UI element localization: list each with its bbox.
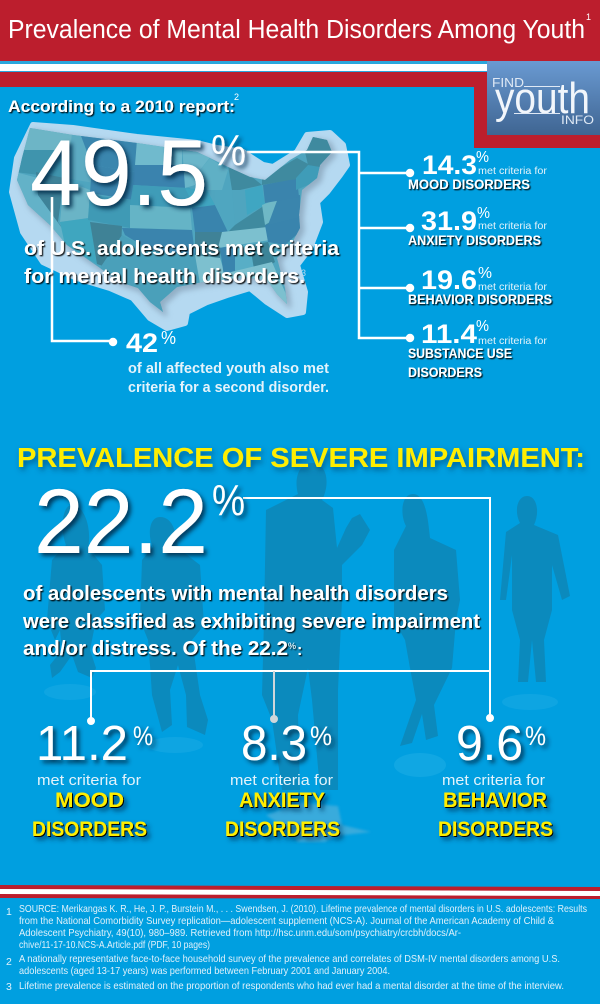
footnotes: Adolescent Psychiatry, 49(10), 980–989. Retrieved from http://hsc.unm.edu/som/psychiatry/crcbh/docs/Ar- [19, 927, 461, 939]
stat: anxiety 8.3% [225, 717, 340, 841]
text: severe impairment description [22, 583, 480, 660]
text: severe impairment description: : [297, 642, 302, 659]
stat: mood 11.2%: % [133, 721, 153, 751]
stat: mood 14.3%: MOOD DISORDERS [408, 177, 530, 192]
US map [12, 120, 347, 328]
stat: mood 11.2%: 11.2 [36, 717, 128, 771]
floor reflections [44, 684, 558, 842]
stat: mood 14.3% [408, 149, 548, 192]
footnotes: 3 [6, 981, 12, 993]
stat: mood 11.2% [32, 717, 153, 841]
footnotes: adolescents (aged 13-17 years) was performed between February 2001 and January 2004. [19, 965, 390, 977]
stat: mood 11.2%: DISORDERS [32, 818, 147, 841]
stat: mood 14.3%: met criteria for [478, 165, 548, 177]
stat: substance use 11.4%: 11.4 [421, 319, 477, 349]
stat: behavior 19.6%: met criteria for [478, 281, 548, 293]
connector lines: 22.2% [88, 498, 493, 724]
text: U.S. adolescents [24, 238, 340, 288]
stat: anxiety 31.9%: 31.9 [421, 206, 477, 236]
stat: anxiety 8.3%: DISORDERS [225, 818, 340, 841]
stat: anxiety 31.9%: % [477, 205, 490, 222]
logo: Find Youth Info [487, 61, 600, 135]
footnote marker 3: 3 [301, 268, 306, 278]
stat: 42% second disorder: 42 [126, 328, 158, 358]
figure 3 [262, 463, 370, 790]
stat: substance use 11.4%: DISORDERS [408, 365, 482, 380]
report intro heading: According to a 2010 report: [8, 97, 235, 116]
title: Prevalence of Mental Health Disorders Among Youth [8, 16, 585, 44]
stat: anxiety 31.9%: ANXIETY DISORDERS [408, 233, 541, 248]
stat: anxiety 31.9%: met criteria for [478, 220, 548, 232]
stat: anxiety 8.3%: ANXIETY [239, 789, 325, 812]
footnotes: 2 [6, 956, 12, 968]
footnotes: chive/11-17-10.NCS-A.Article.pdf (PDF, 10 pages) [19, 939, 210, 951]
text: U.S. adolescents: of U.S. adolescents met criteria [24, 238, 340, 260]
connector lines: 49.5% [52, 152, 413, 345]
logo: Find Youth Info: FIND [492, 75, 524, 90]
report intro heading: 2 [234, 92, 239, 102]
stat: substance use 11.4%: % [476, 318, 489, 335]
figure 4 [394, 494, 460, 746]
stat: mood 11.2%: met criteria for [37, 773, 141, 789]
headline stat: 49.5%: % [211, 126, 246, 175]
stat: behavior 19.6% [408, 265, 552, 307]
stat: behavior 9.6%: 9.6 [456, 717, 523, 771]
stat: behavior 9.6%: % [525, 721, 546, 751]
header band [0, 0, 600, 148]
headline stat: 22.2%: 22.2 [34, 471, 208, 573]
title: 1 [586, 12, 591, 22]
stat: substance use 11.4%: met criteria for [478, 335, 548, 347]
stat: behavior 19.6%: 19.6 [421, 265, 477, 295]
stat: mood 11.2%: MOOD [55, 789, 124, 812]
stat: anxiety 8.3%: 8.3 [241, 717, 307, 771]
stat: behavior 19.6%: BEHAVIOR DISORDERS [408, 292, 552, 307]
stat: mood 14.3%: % [476, 149, 489, 166]
stat: anxiety 8.3%: met criteria for [230, 773, 333, 789]
figure 2 [140, 517, 208, 735]
headline stat: 49.5%: 49.5 [30, 120, 208, 225]
stat: anxiety 31.9% [408, 205, 548, 248]
stat: 42% second disorder: of all affected youth also met [128, 361, 329, 377]
footnotes [6, 903, 587, 993]
logo: Find Youth Info: INFO [561, 113, 594, 127]
stat: mood 14.3%: 14.3 [422, 150, 477, 180]
text: severe impairment description: and/or distress. Of the 22.2 [23, 638, 288, 660]
figure 1 [47, 505, 105, 678]
text: severe impairment description: were classified as exhibiting severe impairment [22, 611, 480, 633]
footer stripes [0, 885, 600, 899]
stat: 42% second disorder: % [161, 328, 176, 348]
stat: anxiety 8.3%: % [310, 721, 332, 751]
stat: 42% second disorder [126, 328, 329, 396]
footnotes: 1 [6, 906, 12, 918]
stat: behavior 19.6%: % [478, 265, 492, 282]
headline stat: 22.2%: % [212, 476, 245, 525]
stat: behavior 9.6%: DISORDERS [438, 818, 553, 841]
stat: behavior 9.6%: BEHAVIOR [443, 789, 547, 812]
stat: behavior 9.6%: met criteria for [442, 773, 545, 789]
text: U.S. adolescents: for mental health disorders. [24, 266, 305, 288]
stat: substance use 11.4% [408, 318, 548, 380]
text: severe impairment description: % [288, 641, 296, 651]
heading: severe impairment: PREVALENCE OF SEVERE IMPAIRMENT: [17, 442, 585, 473]
footnotes: from the National Comorbidity Survey replication—adolescent supplement (NCS-A). Journal of the American Academy of Child & [19, 915, 554, 927]
figure 5 [500, 496, 570, 682]
text: severe impairment description: of adolescents with mental health disorders [23, 583, 448, 605]
stat: substance use 11.4%: SUBSTANCE USE [408, 346, 512, 361]
logo: Find Youth Info: youth [495, 74, 590, 123]
silhouettes of youth [47, 463, 570, 790]
stat: behavior 9.6% [438, 717, 553, 841]
stat: 42% second disorder: criteria for a second disorder. [128, 380, 329, 396]
